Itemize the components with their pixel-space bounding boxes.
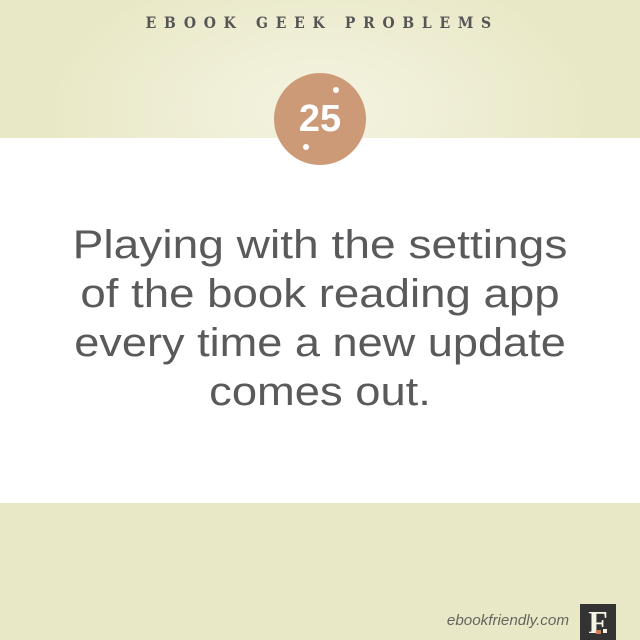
- main statement: comes out.: [209, 370, 431, 414]
- main statement: of the book reading app: [80, 272, 560, 316]
- badge dot bottom: [303, 144, 309, 150]
- title: EBOOK GEEK PROBLEMS: [146, 13, 499, 32]
- badge number: 25: [299, 98, 341, 140]
- logo dot white: [603, 629, 607, 633]
- header band: [0, 0, 640, 138]
- main statement: [73, 223, 567, 414]
- logo: [580, 604, 616, 640]
- badge dot top: [333, 87, 339, 93]
- main statement: every time a new update: [74, 321, 566, 365]
- main statement: Playing with the settings: [73, 223, 567, 267]
- number badge: [274, 73, 366, 165]
- logo letter: F: [588, 604, 608, 640]
- website url: ebookfriendly.com: [447, 612, 569, 629]
- footer band: [0, 503, 640, 640]
- logo dot accent: [596, 630, 601, 634]
